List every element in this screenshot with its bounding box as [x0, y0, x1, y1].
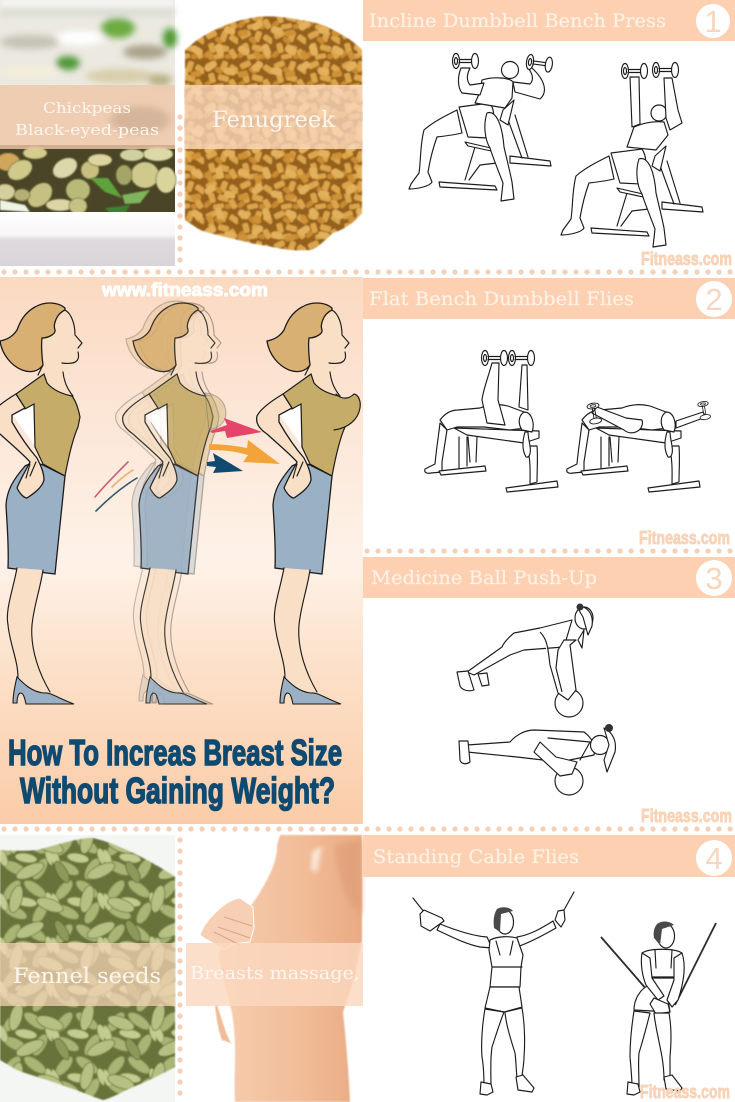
figure: plank top: [457, 604, 593, 717]
figure: arms open: [567, 401, 711, 492]
figure: arms crossed: [601, 921, 716, 1095]
gradient background: [0, 277, 363, 824]
header bar 4: [363, 835, 735, 877]
header bar 3: 3: [705, 561, 723, 596]
header bar 2: 2: [705, 282, 723, 317]
figure: arms raised: [561, 62, 703, 247]
hand: [200, 898, 254, 950]
dotted column divider top: [177, 117, 183, 262]
header bar 3: [363, 557, 735, 598]
site url: www.fitneass.com: [101, 280, 268, 300]
header bar 1: Incline Dumbbell Bench Press: [369, 10, 666, 32]
header bar 2: Flat Bench Dumbbell Flies: [369, 288, 634, 310]
panel: fenugreek seeds photo: [185, 16, 362, 250]
figure: transition ghost: [116, 301, 226, 704]
header bar 2: [363, 278, 735, 319]
figure: arms bent: [409, 54, 553, 201]
headline: How To Increas Breast Size: [8, 732, 342, 773]
label band: fenugreek: Fenugreek: [212, 108, 336, 133]
header bar 4: Standing Cable Flies: [373, 846, 579, 868]
label band: fennel: [0, 943, 175, 1006]
panel: fennel seeds photo: [0, 835, 175, 1102]
dotted column divider bottom: [177, 840, 183, 1098]
arrow: pink: [210, 418, 262, 438]
label band: chickpeas: [0, 85, 175, 149]
headline: [8, 732, 342, 811]
panel: chickpeas photo: [0, 0, 177, 266]
header bar 1: 1: [704, 4, 722, 39]
figure: plank bottom: [459, 724, 615, 795]
header bar 4: 4: [705, 841, 723, 876]
figure: arms wide: [413, 892, 574, 1095]
label band: massage: [186, 943, 363, 1006]
headline: Without Gaining Weight?: [20, 770, 335, 811]
panel: central illustration: [0, 277, 363, 824]
figure: after: [257, 303, 360, 704]
header bar 3: Medicine Ball Push-Up: [371, 567, 597, 589]
motion lines: [95, 462, 137, 511]
label band: chickpeas: Black-eyed-peas: [15, 121, 159, 139]
label band: fenugreek: [185, 85, 362, 149]
dotted row dividers: [4, 272, 735, 829]
panel: exercise 4 standing cable flies: [363, 835, 735, 1102]
panel: exercise 2 flat bench dumbbell flies: [363, 278, 735, 548]
label band: fennel: Fennel seeds: [13, 964, 161, 988]
arrow: navy: [207, 453, 243, 473]
figure: before: [0, 303, 82, 704]
label band: chickpeas: Chickpeas: [43, 99, 131, 117]
panel: exercise 1 incline dumbbell bench press: [363, 0, 735, 269]
arrow: orange: [209, 440, 280, 464]
label band: massage: Breasts massage,: [190, 963, 360, 984]
panel: massage photo: [186, 835, 363, 1102]
figure: arms up: [425, 350, 558, 492]
panel: exercise 3 medicine ball push-up: [363, 557, 735, 826]
header bar 1: [363, 0, 735, 41]
